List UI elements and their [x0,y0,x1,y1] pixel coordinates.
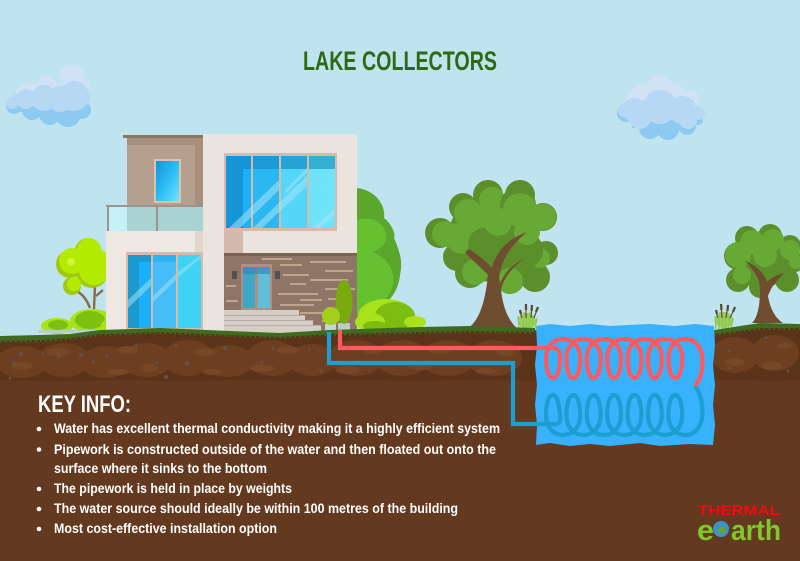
logo: Thermal Earth: arth [731,515,781,547]
lower left block [106,231,203,333]
grass strip [0,326,535,341]
upper small window [154,159,181,203]
red flow pipe [340,330,702,386]
key info list [37,420,500,536]
shrub right of house [355,299,426,333]
bullet 3: The pipework is held in place by weights [54,480,292,496]
house [106,134,357,334]
bullet 2: Pipework is constructed outside of the water and then floated out onto the [54,441,496,457]
logo: Thermal Earth: e [697,515,714,547]
lower left window [126,252,203,330]
upper back block [127,137,203,207]
cloud: right [617,75,705,140]
logo globe [713,521,729,537]
large tree [425,180,558,294]
left shrub [38,309,115,334]
potted topiary [322,280,352,332]
bullet 1: Water has excellent thermal conductivity making it a highly efficient system [54,420,500,436]
logo: Thermal Earth [697,502,781,547]
door [241,264,272,310]
blue return pipe [329,332,702,435]
topsoil texture [0,327,800,381]
logo: Thermal Earth: THERMAL [698,502,781,518]
bullet 2: surface where it sinks to the bottom [54,460,267,476]
bullet 4: The water source should ideally be within 100 metres of the building [54,500,458,516]
wall lamps [232,271,280,279]
ground [0,323,800,561]
left small tree [38,238,115,334]
bullet 2 [37,441,496,476]
balcony [106,205,203,231]
right small tree [724,224,800,323]
large upper window [224,153,337,231]
title: LAKE COLLECTORS [303,46,497,76]
cloud: left [6,65,91,127]
stones [8,336,790,380]
reeds left [518,304,538,329]
lake [535,324,715,446]
bush behind house [357,188,401,320]
brick wall [224,253,357,333]
key info heading: KEY INFO: [38,391,131,418]
shadow under upper window [224,231,243,253]
bullet 5: Most cost-effective installation option [54,520,277,536]
large tree trunk [465,232,527,329]
reeds right [715,304,735,329]
steps [224,310,321,334]
main block [203,134,357,333]
